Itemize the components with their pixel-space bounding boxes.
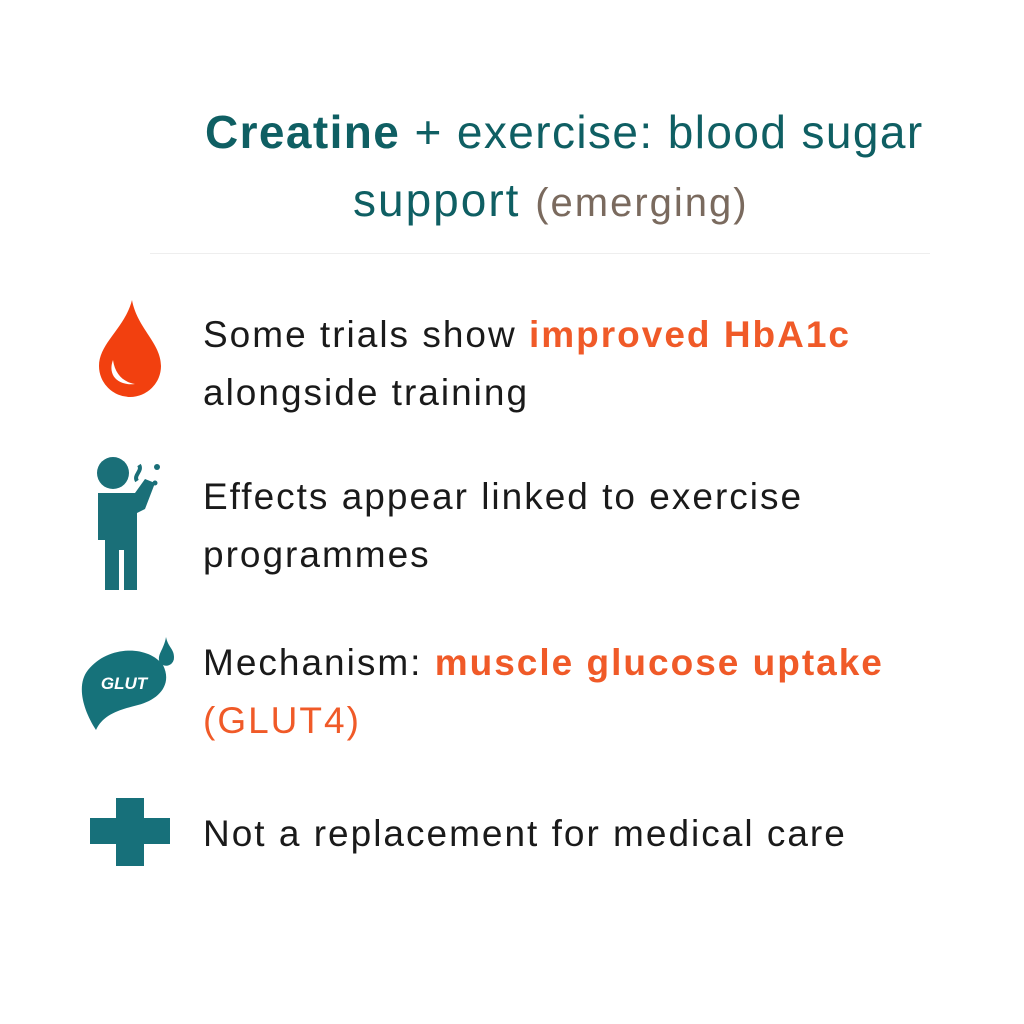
title: support (emerging) (353, 174, 749, 226)
text: mechanism: Mechanism: muscle glucose uptake (203, 642, 884, 683)
title: Creatine + exercise: blood sugar (205, 106, 924, 158)
text: HbA1c: Some trials show improved HbA1c (203, 314, 851, 355)
text: HbA1c (203, 314, 851, 413)
text: exercise: programmes (203, 534, 431, 575)
text: medical care: Not a replacement for medical care (203, 813, 847, 854)
text: mechanism: (GLUT4) (203, 700, 361, 741)
icon: GLUT (82, 637, 174, 730)
icon: blood drop (99, 300, 161, 397)
text: HbA1c: alongside training (203, 372, 529, 413)
icon: medical cross (90, 798, 170, 866)
text: exercise: Effects appear linked to exercise (203, 476, 803, 517)
title (205, 106, 924, 226)
icon: GLUT: GLUT (101, 674, 149, 693)
text: mechanism (203, 642, 884, 741)
text: exercise (203, 476, 803, 575)
icon: person (97, 457, 160, 590)
